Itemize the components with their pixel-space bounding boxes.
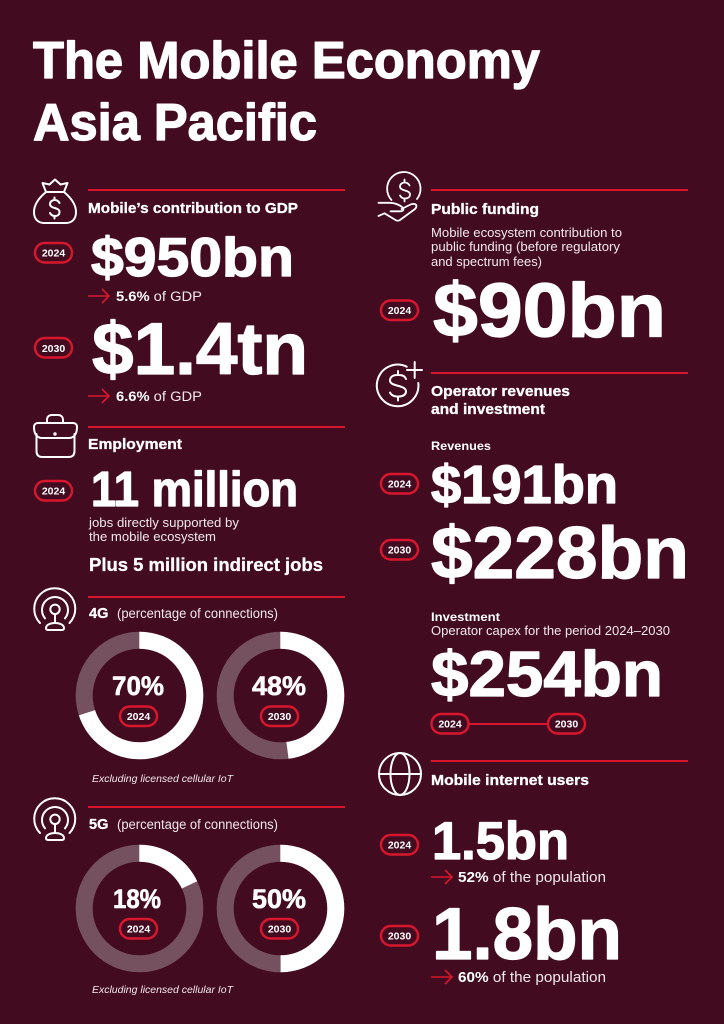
description (431, 226, 622, 269)
pill 2030: 2030 (42, 343, 65, 355)
title (33, 32, 540, 152)
heading: (percentage of connections) (117, 606, 278, 621)
pill 2024 (381, 300, 418, 320)
heading: Operator revenues (431, 384, 570, 400)
value 1.5bn: 1.5bn (432, 812, 569, 871)
donut: 70% 2024: 2024 (127, 711, 150, 723)
heading: 5G (89, 817, 108, 833)
donut: 70% 2024 (84, 640, 195, 751)
value 228bn: $228bn (431, 513, 689, 594)
share of population: 52% of the population (458, 870, 606, 886)
pill 2024 (35, 481, 72, 500)
value 191bn: $191bn (431, 455, 618, 515)
panel: mobile's contribution to GDP (34, 180, 345, 404)
pill 2024: 2024 (42, 248, 65, 260)
description: the mobile ecosystem (89, 530, 216, 544)
heading: and investment (431, 402, 545, 418)
pill 2024: 2024 (388, 840, 411, 852)
description: public funding (before regulatory (431, 240, 621, 254)
donut: 48% 2030 (225, 640, 336, 751)
donut: 50% 2030 (225, 853, 336, 964)
pill 2024: 2024 (388, 305, 411, 317)
pill 2030: 2030 (388, 930, 411, 942)
panel: public funding (378, 172, 688, 354)
heading: Mobile’s contribution to GDP (88, 201, 298, 217)
heading: Public funding (431, 202, 539, 218)
share of GDP: 6.6% of GDP (116, 389, 202, 404)
pill range 2024-2030: 2024 (438, 718, 462, 730)
heading: 4G (89, 606, 108, 622)
arrow (431, 970, 452, 984)
description: and spectrum fees) (431, 255, 542, 269)
title: Asia Pacific (33, 94, 317, 152)
pill 2024: 2024 (388, 478, 411, 490)
heading: Employment (88, 437, 182, 453)
value 1.4tn: $1.4tn (92, 309, 308, 390)
pill 2024: 2024 (42, 486, 65, 498)
revenues label: Revenues (431, 439, 491, 453)
panel: 5G (34, 798, 345, 996)
value 90bn: $90bn (433, 268, 666, 354)
panel: employment (34, 415, 345, 575)
panel: 4G (34, 588, 345, 785)
icon: antenna (34, 798, 75, 840)
donut: 50% 2030: 2030 (268, 924, 291, 936)
value 254bn: $254bn (431, 638, 663, 710)
investment label (431, 610, 670, 638)
panel: mobile internet users (379, 753, 688, 986)
heading: Mobile internet users (431, 773, 589, 789)
pill 2024 (381, 835, 418, 854)
donut: 18% 2024 (84, 853, 195, 964)
donut: 18% 2024: 18% (113, 884, 161, 914)
icon: hand with coin (378, 172, 421, 221)
donut: 50% 2030: 50% (252, 884, 306, 914)
pill 2030 (381, 540, 418, 560)
value 11 million: 11 million (91, 463, 298, 517)
description: Mobile ecosystem contribution to (431, 226, 622, 240)
pill 2030: 2030 (388, 544, 411, 556)
icon: money bag (34, 180, 76, 223)
donut: 48% 2030: 2030 (268, 711, 291, 723)
pill 2024 (381, 474, 418, 494)
investment label: Investment (431, 610, 500, 624)
footnote: Excluding licensed cellular IoT (92, 774, 234, 785)
share of GDP: 5.6% of GDP (116, 289, 202, 304)
footnote: Excluding licensed cellular IoT (92, 985, 234, 996)
share of population: 60% of the population (458, 970, 606, 986)
icon: briefcase (34, 415, 77, 457)
donut: 48% 2030: 48% (252, 671, 306, 701)
pill range 2024-2030 (432, 714, 585, 734)
pill range 2024-2030: 2030 (555, 718, 578, 730)
pill 2024 (35, 243, 72, 262)
arrow (88, 289, 109, 303)
arrow (431, 870, 452, 884)
donut: 70% 2024: 70% (112, 671, 164, 701)
donut: 18% 2024: 2024 (127, 924, 150, 936)
icon: antenna (34, 588, 75, 630)
icon: dollar plus (377, 362, 422, 406)
pill 2030 (35, 338, 72, 358)
heading (431, 384, 570, 418)
indirect jobs: Plus 5 million indirect jobs (89, 555, 323, 575)
pill 2030 (381, 926, 418, 946)
value 950bn: $950bn (91, 226, 294, 288)
panel: operator revenues and investment (377, 362, 689, 734)
investment label: Operator capex for the period 2024–2030 (431, 624, 670, 638)
heading: (percentage of connections) (117, 817, 278, 832)
title: The Mobile Economy (33, 32, 540, 90)
description (88, 516, 240, 544)
value 1.8bn: 1.8bn (432, 894, 622, 975)
description: jobs directly supported by (88, 516, 240, 530)
icon: globe (379, 753, 421, 795)
arrow (88, 389, 109, 403)
